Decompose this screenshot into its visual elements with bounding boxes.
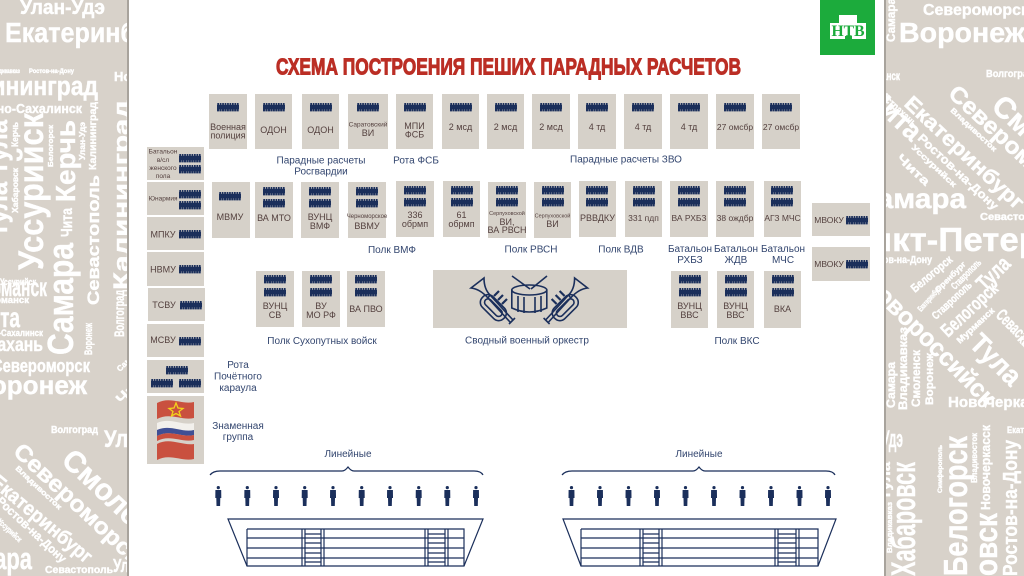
- tile: МСВУ: МСВУ: [150, 335, 176, 345]
- tile: Батальон в/сл женского пола: женского: [149, 165, 177, 172]
- tile: ОДОН: ОДОН: [260, 125, 287, 135]
- caption: Парадные расчеты Росгвардии: Росгвардии: [294, 166, 348, 178]
- tile: Юнармия: Юнармия: [148, 196, 178, 202]
- tile: 4 тд: 4 тд: [589, 122, 606, 132]
- tile: МВМУ: МВМУ: [217, 212, 244, 222]
- tile: 4 тд: [578, 94, 616, 149]
- tile: Военная полиция: Военная: [210, 122, 246, 132]
- tile: ВУНЦ ВВС: ВВС: [680, 310, 699, 320]
- panel: left city word cloud: Улан-Удэ: [78, 121, 87, 160]
- icon: right trumpet: [544, 278, 588, 324]
- tile: ВУ МО РФ: ВУ: [315, 301, 327, 311]
- caption: Рота Почётного караула: Рота: [227, 360, 249, 371]
- tile: ВУНЦ ВМФ: [301, 182, 339, 238]
- tile: Батальон в/сл женского пола: в/сл: [157, 157, 169, 164]
- tile: ВУ МО РФ: МО РФ: [306, 310, 336, 320]
- panel: left city word cloud: Керчь: [50, 120, 81, 202]
- panel: left city word cloud: Самара: [40, 242, 81, 355]
- tile: 27 омсбр: [716, 94, 754, 149]
- caption: Батальон МЧС: Батальон: [761, 244, 805, 255]
- panel: right city word cloud: Тула: [877, 462, 893, 500]
- caption: Батальон ЖДВ: Батальон: [714, 244, 758, 255]
- group: left line markers: [210, 449, 483, 566]
- tile: Черноморское ВВМУ: ВВМУ: [354, 221, 380, 231]
- caption: Сводный военный оркестр: Сводный военный оркестр: [465, 336, 589, 346]
- icon: red flag lower: [157, 441, 194, 460]
- panel: right city word cloud: Симферополь: [937, 445, 944, 493]
- tile: 61 обрмп: обрмп: [448, 219, 475, 229]
- caption: Парадные расчеты Росгвардии: [277, 156, 365, 178]
- caption: Линейные: Линейные: [675, 449, 723, 460]
- tile: ВУНЦ СВ: [256, 271, 294, 327]
- tile: Серпуховской ВИ: [534, 182, 571, 238]
- tile: ВУ МО РФ: [302, 271, 340, 327]
- tile: 2 мсд: [442, 94, 479, 149]
- panel: left city word cloud: Самара: [115, 345, 143, 373]
- caption: Знаменная группа: [212, 421, 264, 443]
- tile: Саратовский ВИ: ВИ: [362, 128, 374, 138]
- panel: left city word cloud: Волгоград: [51, 425, 99, 436]
- panel: left city word cloud: Калининград: [88, 101, 99, 170]
- panel: left city word cloud: Воронеж: [83, 323, 95, 355]
- panel: right city word cloud: Тула: [971, 251, 1016, 296]
- caption: Знаменная группа: Знаменная: [212, 421, 264, 432]
- figures: ten line markers: [568, 486, 831, 506]
- caption: Батальон МЧС: МЧС: [772, 255, 794, 266]
- tile: ВУНЦ ВВС: ВУНЦ: [723, 301, 748, 311]
- tile: ВА РХБЗ: [670, 181, 708, 237]
- tile: Серпуховской ВИ, ВА РВСН: ВА РВСН: [488, 225, 526, 235]
- panel: left city word cloud: Хабаровск: [11, 167, 20, 213]
- brace: [562, 467, 835, 475]
- tile: ВКА: [764, 271, 801, 328]
- panel: right city word cloud: Владикавказ: [887, 501, 894, 553]
- icon: left trumpet: [471, 278, 515, 324]
- tile: 331 пдп: [625, 181, 662, 237]
- tile: ВУНЦ ВВС: [671, 271, 708, 328]
- panel: left city word cloud: Чита: [113, 367, 154, 408]
- panel: right city word cloud: Мурманск: [860, 69, 901, 83]
- tile: Саратовский ВИ: [348, 94, 388, 149]
- caption: Рота Почётного караула: Почётного: [214, 372, 262, 382]
- tile: ОДОН: [255, 94, 292, 149]
- tile: ТСВУ: ТСВУ: [152, 300, 176, 310]
- tile: 2 мсд: 2 мсд: [494, 122, 518, 132]
- tile: МПКУ: МПКУ: [150, 230, 176, 240]
- panel: right city word cloud: овск: [968, 512, 1004, 576]
- caption: Батальон РХБЗ: [668, 244, 712, 266]
- tile: Юнармия: [147, 182, 204, 215]
- panel: right city word cloud: [886, 0, 1024, 576]
- panel: right city word cloud: Ростов-на-Дону: [1000, 439, 1022, 576]
- tile: Рота Почётного караула formation: [147, 360, 204, 393]
- tile: 61 обрмп: [443, 181, 480, 237]
- caption: Полк ВМФ: Полк ВМФ: [368, 245, 416, 256]
- panel: left city word cloud: Ростов-на-Дону: [29, 68, 74, 75]
- panel: right city word cloud: Смоленск: [909, 349, 923, 407]
- panel: left city word cloud: Белогорск: [48, 124, 55, 167]
- caption: Знаменная группа: группа: [223, 432, 254, 443]
- tile: МВОКУ: МВОКУ: [814, 215, 844, 225]
- tile: 38 ождбр: [716, 181, 754, 237]
- caption: Батальон РХБЗ: Батальон: [668, 244, 712, 255]
- tile: ВУНЦ ВМФ: ВУНЦ: [308, 212, 333, 222]
- panel: right city word cloud: Улан-Удэ: [850, 426, 903, 453]
- tile: Серпуховской ВИ, ВА РВСН: [488, 182, 526, 238]
- panel: left city word cloud: Волгоград: [111, 290, 127, 337]
- caption: Батальон ЖДВ: [714, 244, 758, 266]
- tile: orchestra with drum and trumpets: [433, 270, 627, 328]
- caption: Полк ВКС: Полк ВКС: [714, 336, 760, 347]
- title: СХЕМА ПОСТРОЕНИЯ ПЕШИХ ПАРАДНЫХ РАСЧЕТОВ: [276, 54, 741, 80]
- panel: left city word cloud: Керчь: [10, 122, 20, 147]
- tile: РВВДКУ: РВВДКУ: [580, 213, 615, 223]
- panel: left city word cloud: Улан-Удэ: [104, 426, 194, 453]
- tile: ВА МТО: [255, 182, 293, 238]
- tile: ВУНЦ ВВС: ВУНЦ: [677, 301, 702, 311]
- panel: right city word cloud: Мурманск: [955, 305, 997, 345]
- panel: left city word cloud: Севастополь: [45, 565, 113, 576]
- tile: 2 мсд: 2 мсд: [449, 122, 473, 132]
- tile: МВОКУ: [812, 203, 870, 236]
- caption: Рота ФСБ: Рота ФСБ: [393, 156, 439, 166]
- caption: Парадные расчеты Росгвардии: Парадные расчеты: [277, 156, 365, 166]
- tile: Черноморское ВВМУ: Черноморское: [347, 214, 388, 220]
- panel: right city word cloud: Екатеринбург: [916, 283, 944, 313]
- tile: Батальон в/сл женского пола: Батальон: [149, 148, 178, 156]
- tile: Черноморское ВВМУ: [347, 182, 388, 238]
- tile: МПИ ФСБ: [396, 94, 433, 149]
- brace: [210, 467, 483, 475]
- panel: left city word cloud: Смоленск: [55, 443, 184, 567]
- panel: right city word cloud: Хабаровск: [885, 461, 923, 576]
- tile: НВМУ: НВМУ: [150, 264, 176, 274]
- tile: МВМУ: [212, 182, 250, 238]
- panel: right city word cloud: Воронеж: [899, 17, 1024, 48]
- panel: right city word cloud: Екатеринбург: [900, 92, 1024, 215]
- tile: ВА МТО: ВА МТО: [257, 213, 291, 223]
- caption: Рота Почётного караула: караула: [219, 383, 257, 394]
- icon: drum: [512, 276, 547, 313]
- caption: Линейные: Линейные: [324, 449, 372, 460]
- tile: ТСВУ: [148, 288, 205, 321]
- panel: right city word cloud: Чита: [894, 151, 933, 189]
- panel: right city word cloud: Новочеркасск: [978, 425, 993, 510]
- tile: ВУНЦ ВВС: [717, 271, 754, 328]
- tile: ОДОН: [302, 94, 339, 149]
- tile: МПИ ФСБ: ФСБ: [405, 130, 424, 140]
- panel: right city word cloud: Воронеж: [924, 353, 936, 405]
- tile: МВОКУ: [812, 247, 870, 281]
- caption: Батальон МЧС: [761, 244, 805, 266]
- panel: left city word cloud: Уссурийск: [0, 277, 36, 287]
- panel: left city word cloud: Североморск: [9, 438, 147, 570]
- panel: right city word cloud: Чита: [862, 82, 929, 147]
- tile: АГЗ МЧС: [764, 181, 801, 237]
- tile: ОДОН: ОДОН: [307, 125, 334, 135]
- caption: Парадные расчеты ЗВО: Парадные расчеты ЗВО: [570, 154, 682, 166]
- tile: ВКА: ВКА: [774, 304, 791, 314]
- tile: 336 обрмп: [396, 181, 434, 237]
- panel: right city word cloud: Самара: [884, 362, 898, 408]
- tile: ВУНЦ ВВС: ВВС: [726, 310, 745, 320]
- panel: right city word cloud: Уссурийск: [910, 143, 959, 190]
- panel: right city word cloud: Астрахань: [878, 90, 919, 130]
- tile: Военная полиция: [209, 94, 247, 149]
- panel: right city word cloud: Новороссийск: [858, 268, 1002, 412]
- panel: right city word cloud: Ставрополь: [930, 279, 975, 322]
- caption: Батальон ЖДВ: ЖДВ: [725, 255, 748, 266]
- tile: 4 тд: [624, 94, 662, 149]
- panel: right city word cloud: Белогорск: [908, 252, 956, 295]
- tile: 2 мсд: 2 мсд: [539, 122, 563, 132]
- tile: МПИ ФСБ: МПИ: [404, 121, 425, 131]
- tile: 4 тд: 4 тд: [681, 122, 698, 132]
- caption: Рота Почётного караула: [214, 360, 262, 394]
- tile: 2 мсд: [487, 94, 524, 149]
- tile: АГЗ МЧС: АГЗ МЧС: [764, 213, 801, 223]
- panel: left city word cloud: Чита: [59, 208, 76, 237]
- panel: left city word cloud: Владивосток: [14, 464, 64, 512]
- panel: left city word cloud: Улан-Удэ: [113, 556, 173, 576]
- tile: ВУНЦ СВ: СВ: [269, 310, 281, 320]
- caption: Полк Сухопутных войск: Полк Сухопутных войск: [267, 336, 377, 347]
- tile: 27 омсбр: 27 омсбр: [763, 122, 799, 132]
- icon: NTV logo: НТВ: [832, 23, 864, 40]
- tile: Серпуховской ВИ: ВИ: [546, 219, 559, 229]
- panel: right city word cloud: Владивосток: [949, 106, 999, 154]
- panel: right city word cloud: Белогорск: [937, 436, 974, 576]
- tile: banner group flags: [147, 396, 204, 464]
- tile: 2 мсд: [532, 94, 570, 149]
- panel: right city word cloud: Владивосток: [970, 432, 979, 483]
- tile: ВА ПВО: [347, 271, 385, 327]
- tile: Батальон в/сл женского пола: пола: [156, 173, 171, 180]
- tile: 336 обрмп: обрмп: [402, 219, 428, 229]
- tribune: [563, 519, 836, 566]
- panel: right city word cloud: Ростов-на-Дону: [915, 131, 1002, 213]
- panel: right city word cloud: Ставрополь: [949, 257, 984, 292]
- tile: Серпуховской ВИ, ВА РВСН: Серпуховской: [489, 210, 525, 217]
- tile: 336 обрмп: 336: [407, 210, 423, 220]
- caption: Полк ВДВ: Полк ВДВ: [598, 244, 644, 256]
- tile: ВУНЦ СВ: ВУНЦ: [263, 301, 288, 311]
- tile: Серпуховской ВИ: Серпуховской: [535, 212, 570, 220]
- tile: 331 пдп: 331 пдп: [628, 213, 659, 223]
- tile: Военная полиция: полиция: [210, 130, 246, 140]
- tile: 4 тд: [670, 94, 708, 149]
- tile: ВА ПВО: ВА ПВО: [349, 304, 383, 314]
- panel: right city word cloud: Владикавказ: [896, 327, 910, 410]
- tile: МСВУ: [147, 324, 204, 357]
- tile: ВА РХБЗ: ВА РХБЗ: [672, 213, 706, 223]
- figures: ten line markers: [215, 486, 479, 506]
- tile: 38 ождбр: 38 ождбр: [717, 213, 754, 223]
- icon: NTV logo: [820, 0, 875, 55]
- panel: right city word cloud: Самара: [855, 183, 966, 214]
- tile: Саратовский ВИ: Саратовский: [349, 120, 388, 128]
- group: right line markers: [562, 449, 836, 566]
- tile: Батальон в/сл женского пола: [147, 147, 204, 180]
- icon: Russian tricolour: [157, 421, 194, 441]
- tile: ВУНЦ ВМФ: ВМФ: [310, 221, 330, 231]
- panel: left city word cloud: Уссурийск: [12, 113, 51, 270]
- tile: 27 омсбр: 27 омсбр: [717, 122, 753, 132]
- tile: НВМУ: [147, 252, 204, 286]
- tile: РВВДКУ: [579, 181, 616, 237]
- panel: left city word cloud: Севастополь: [84, 175, 103, 305]
- panel: left city word cloud: Калининград: [109, 100, 134, 290]
- panel: left city word cloud: Новочеркасск: [114, 69, 204, 84]
- panel: right city word cloud: Белогорск: [937, 278, 1003, 342]
- panel: right city word cloud: Ростов-на-Дону: [863, 255, 932, 266]
- tribune: [228, 519, 483, 566]
- caption: Батальон РХБЗ: РХБЗ: [677, 255, 703, 266]
- panel: left city word cloud: Екатеринбург: [5, 17, 175, 48]
- tile: МВОКУ: МВОКУ: [814, 259, 844, 269]
- tile: Серпуховской ВИ, ВА РВСН: ВИ,: [500, 217, 514, 227]
- tile: 4 тд: 4 тд: [635, 122, 652, 132]
- caption: Полк РВСН: Полк РВСН: [505, 244, 557, 256]
- tile: 61 обрмп: 61: [456, 210, 467, 220]
- tile: МПКУ: [147, 217, 204, 250]
- tile: 27 омсбр: [762, 94, 800, 149]
- panel: left city word cloud: [0, 0, 127, 576]
- panel: right city word cloud: Оренбург: [933, 259, 968, 294]
- icon: red flag with star: [157, 400, 194, 419]
